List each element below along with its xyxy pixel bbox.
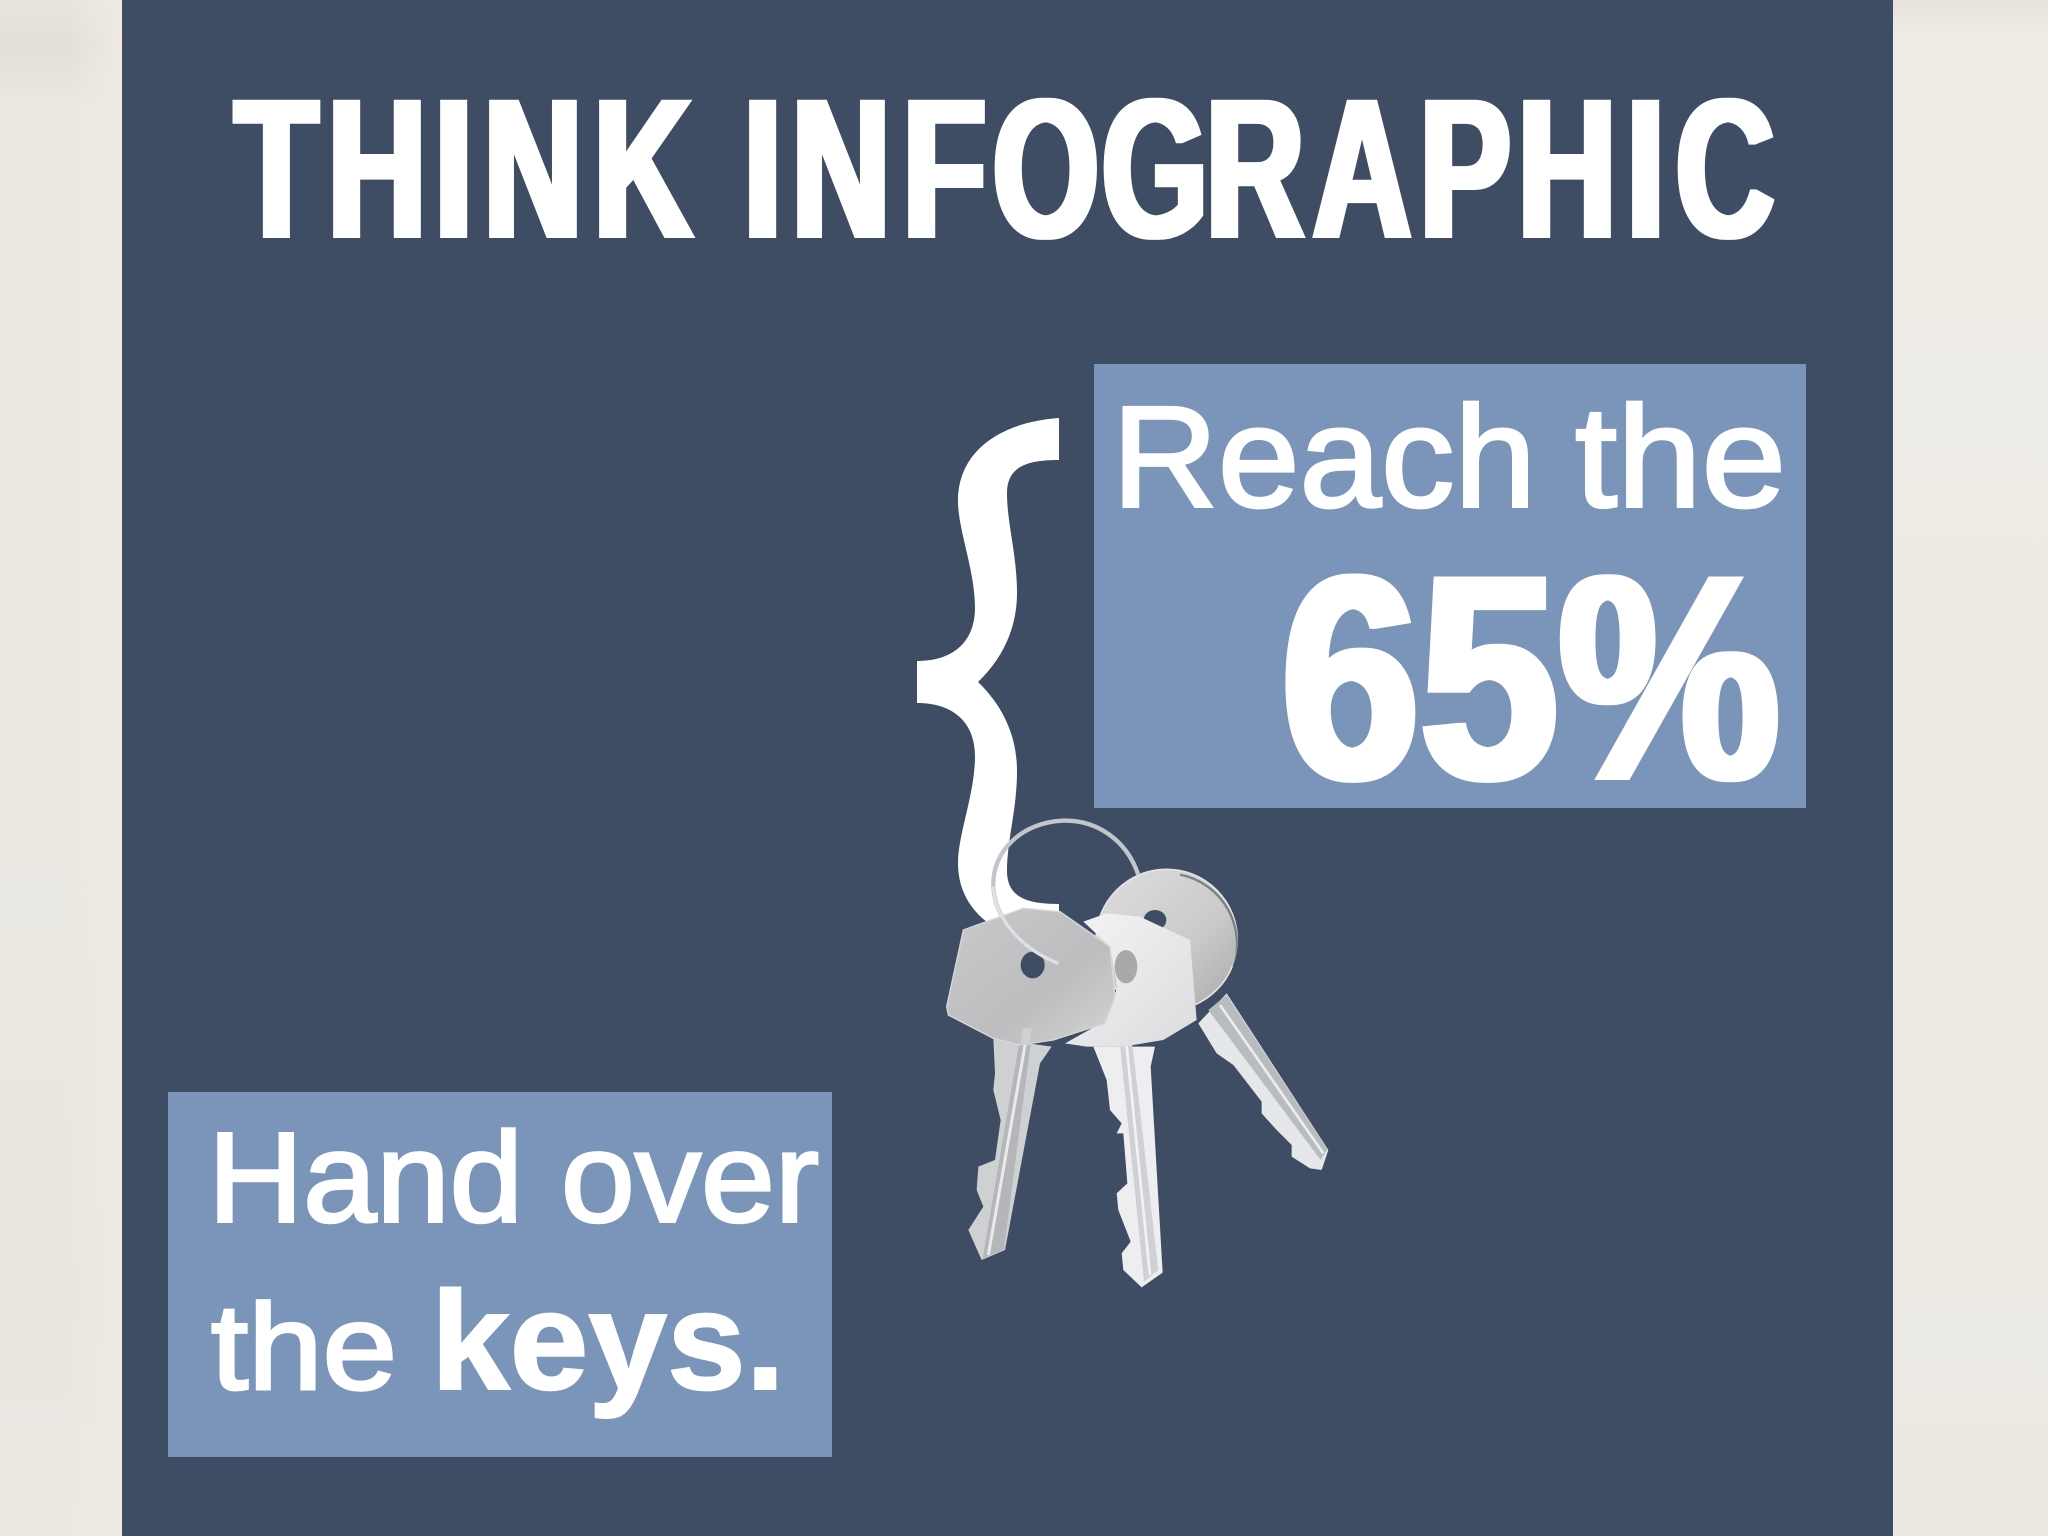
callout: reach the 65% xyxy=(1094,364,1806,840)
back key round head xyxy=(1096,869,1237,1011)
title: THINK INFOGRAPHIC xyxy=(235,59,1774,280)
key ring xyxy=(993,821,1138,963)
callout text: the keys: keys. xyxy=(431,1262,785,1419)
middle key blade xyxy=(1093,1047,1163,1287)
callout text: hand over: Hand xyxy=(208,1106,523,1250)
front key blade xyxy=(968,1038,1052,1260)
back key groove xyxy=(1208,995,1327,1160)
callout text: reach the: the xyxy=(1575,376,1786,538)
back key blade xyxy=(1198,993,1328,1170)
callout: hand over the keys xyxy=(168,1092,832,1457)
callout text: reach the xyxy=(1112,376,1786,538)
callout text: hand over xyxy=(208,1106,819,1250)
middle key head xyxy=(1065,913,1197,1047)
front key head xyxy=(947,908,1115,1045)
callout text: reach the: Reach xyxy=(1112,376,1536,538)
statistic: 65%: 65% xyxy=(1281,516,1780,840)
callout text: hand over: over xyxy=(561,1106,819,1250)
curly brace xyxy=(917,418,1059,946)
callout text: the keys: the xyxy=(211,1279,397,1415)
icon: bunch of three keys on a ring xyxy=(947,821,1328,1287)
callout text: the keys xyxy=(211,1262,785,1419)
